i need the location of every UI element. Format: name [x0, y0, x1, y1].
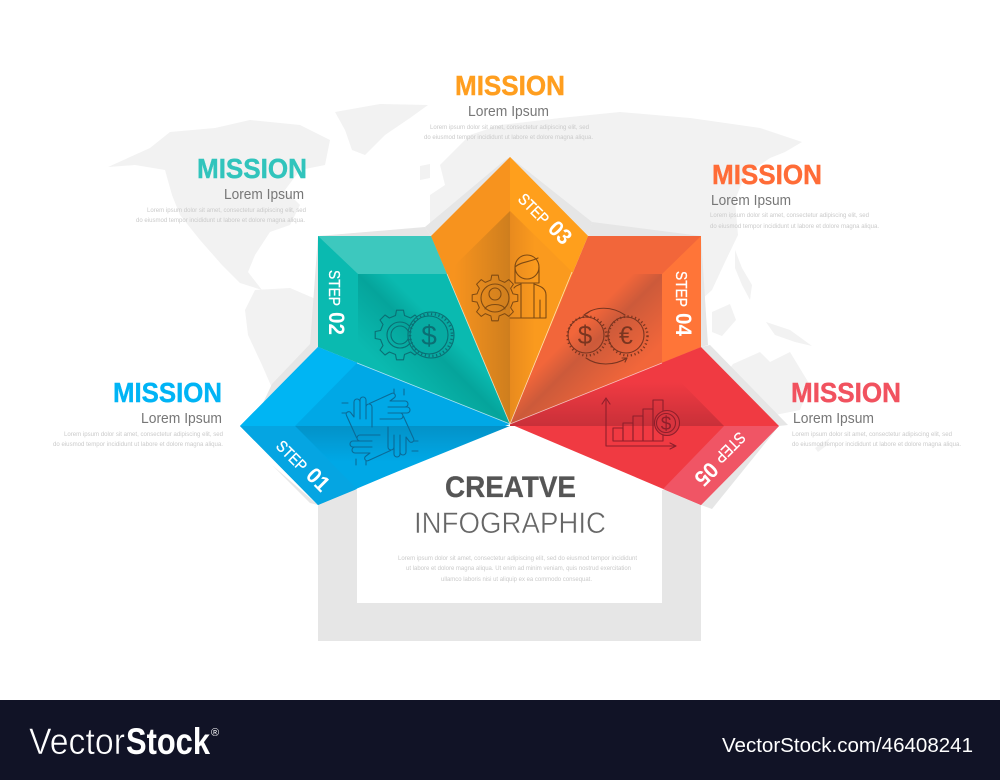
text block: mission step 04: Lorem ipsum dolor sit amet, consectetur adipiscing elit, sed — [710, 212, 869, 219]
text block: mission step 01 — [53, 377, 223, 448]
title: creative infographic: INFOGRAPHIC — [414, 507, 606, 540]
text block: mission step 05: Lorem ipsum dolor sit amet, consectetur adipiscing elit, sed — [792, 431, 952, 438]
frame and card shadows — [263, 157, 788, 641]
label: step 05: STEP — [711, 428, 748, 466]
text block: mission step 01: Lorem Ipsum — [141, 411, 222, 427]
text block: centre description — [398, 555, 637, 583]
label: step 03: 03 — [543, 216, 577, 249]
text block: mission step 04: do eiusmod tempor incididunt ut labore et dolore magna aliqua. — [710, 223, 879, 230]
panel: step 02 teal — [318, 236, 510, 424]
logo: VectorStock: Vector — [29, 721, 125, 762]
footer url: VectorStock.com/46408241 — [722, 735, 973, 757]
label: step 02: STEP — [325, 270, 342, 306]
logo: VectorStock: ® — [211, 727, 219, 739]
label: step 03 — [513, 186, 577, 249]
label: step 04 — [671, 271, 696, 337]
text block: mission step 02: Lorem Ipsum — [224, 187, 304, 203]
icon: gear and dollar coin — [375, 310, 454, 360]
text block: mission step 05 — [791, 377, 961, 448]
panel: step 03 orange — [431, 157, 588, 424]
text block: mission step 02: Lorem ipsum dolor sit amet, consectetur adipiscing elit, sed — [147, 207, 306, 214]
icon: currency exchange coins — [568, 308, 648, 364]
panel: step 05 red — [510, 347, 779, 505]
icon: gear and dollar coin: $ — [421, 320, 437, 351]
text block: mission step 02 — [136, 153, 307, 224]
label: step 01 — [271, 433, 335, 496]
logo: VectorStock: Stock — [126, 721, 210, 762]
title: creative infographic — [414, 471, 606, 540]
text block: mission step 05: Lorem Ipsum — [793, 411, 874, 427]
label: step 03: STEP — [514, 191, 552, 228]
text block: mission step 05: do eiusmod tempor incididunt ut labore et dolore magna aliqua. — [792, 441, 961, 448]
footer bar — [0, 700, 1000, 780]
text block: mission step 03: do eiusmod tempor incididunt ut labore et dolore magna aliqua. — [424, 134, 593, 141]
text block: mission step 02: MISSION — [197, 153, 307, 184]
text block: mission step 04: MISSION — [712, 159, 822, 190]
label: step 02: 02 — [324, 312, 349, 335]
text block: mission step 03: Lorem Ipsum — [468, 104, 549, 120]
text block: mission step 04 — [710, 159, 879, 230]
label: step 05: 05 — [690, 457, 723, 491]
text block: mission step 01: Lorem ipsum dolor sit amet, consectetur adipiscing elit, sed — [64, 431, 223, 438]
title: creative infographic: CREATVE — [445, 471, 576, 504]
text block: mission step 03: MISSION — [455, 70, 565, 101]
label: step 01: 01 — [301, 463, 335, 496]
icon: four joined hands — [342, 389, 418, 465]
text block: mission step 01: do eiusmod tempor incididunt ut labore et dolore magna aliqua. — [53, 441, 223, 448]
world map — [108, 104, 830, 452]
text block: mission step 05: MISSION — [791, 377, 901, 408]
text block: mission step 01: MISSION — [113, 377, 222, 408]
text block: mission step 03 — [424, 70, 593, 141]
text block: centre description: Lorem ipsum dolor sit amet, consectetur adipiscing elit, sed do eiusmod tempor incididunt — [398, 555, 637, 562]
label: step 02 — [324, 270, 349, 335]
centre white card — [357, 430, 662, 603]
icon: currency exchange coins: € — [619, 322, 633, 350]
panel: step 01 blue — [240, 347, 510, 505]
label: step 01: STEP — [272, 438, 310, 475]
label: step 04: 04 — [671, 313, 696, 337]
icon: person gear and woman — [472, 255, 546, 321]
logo: VectorStock — [29, 721, 219, 762]
text block: mission step 04: Lorem Ipsum — [711, 193, 791, 209]
panel: step 04 red-orange — [510, 236, 701, 424]
text block: mission step 03: Lorem ipsum dolor sit amet, consectetur adipiscing elit, sed — [430, 124, 589, 131]
icon: bar chart with coin: $ — [661, 414, 672, 435]
icon: currency exchange coins: $ — [578, 320, 593, 350]
text block: centre description: ullamco laboris nisi ut aliquip ex ea commodo consequat. — [441, 576, 592, 583]
label: step 05 — [690, 427, 753, 491]
text block: mission step 02: do eiusmod tempor incididunt ut labore et dolore magna aliqua. — [136, 217, 305, 224]
text block: centre description: ut labore et dolore magna aliqua. Ut enim ad minim veniam, quis nostrud exercitation — [406, 565, 631, 572]
label: step 04: STEP — [672, 271, 689, 307]
icon: bar chart with coin — [602, 398, 680, 449]
